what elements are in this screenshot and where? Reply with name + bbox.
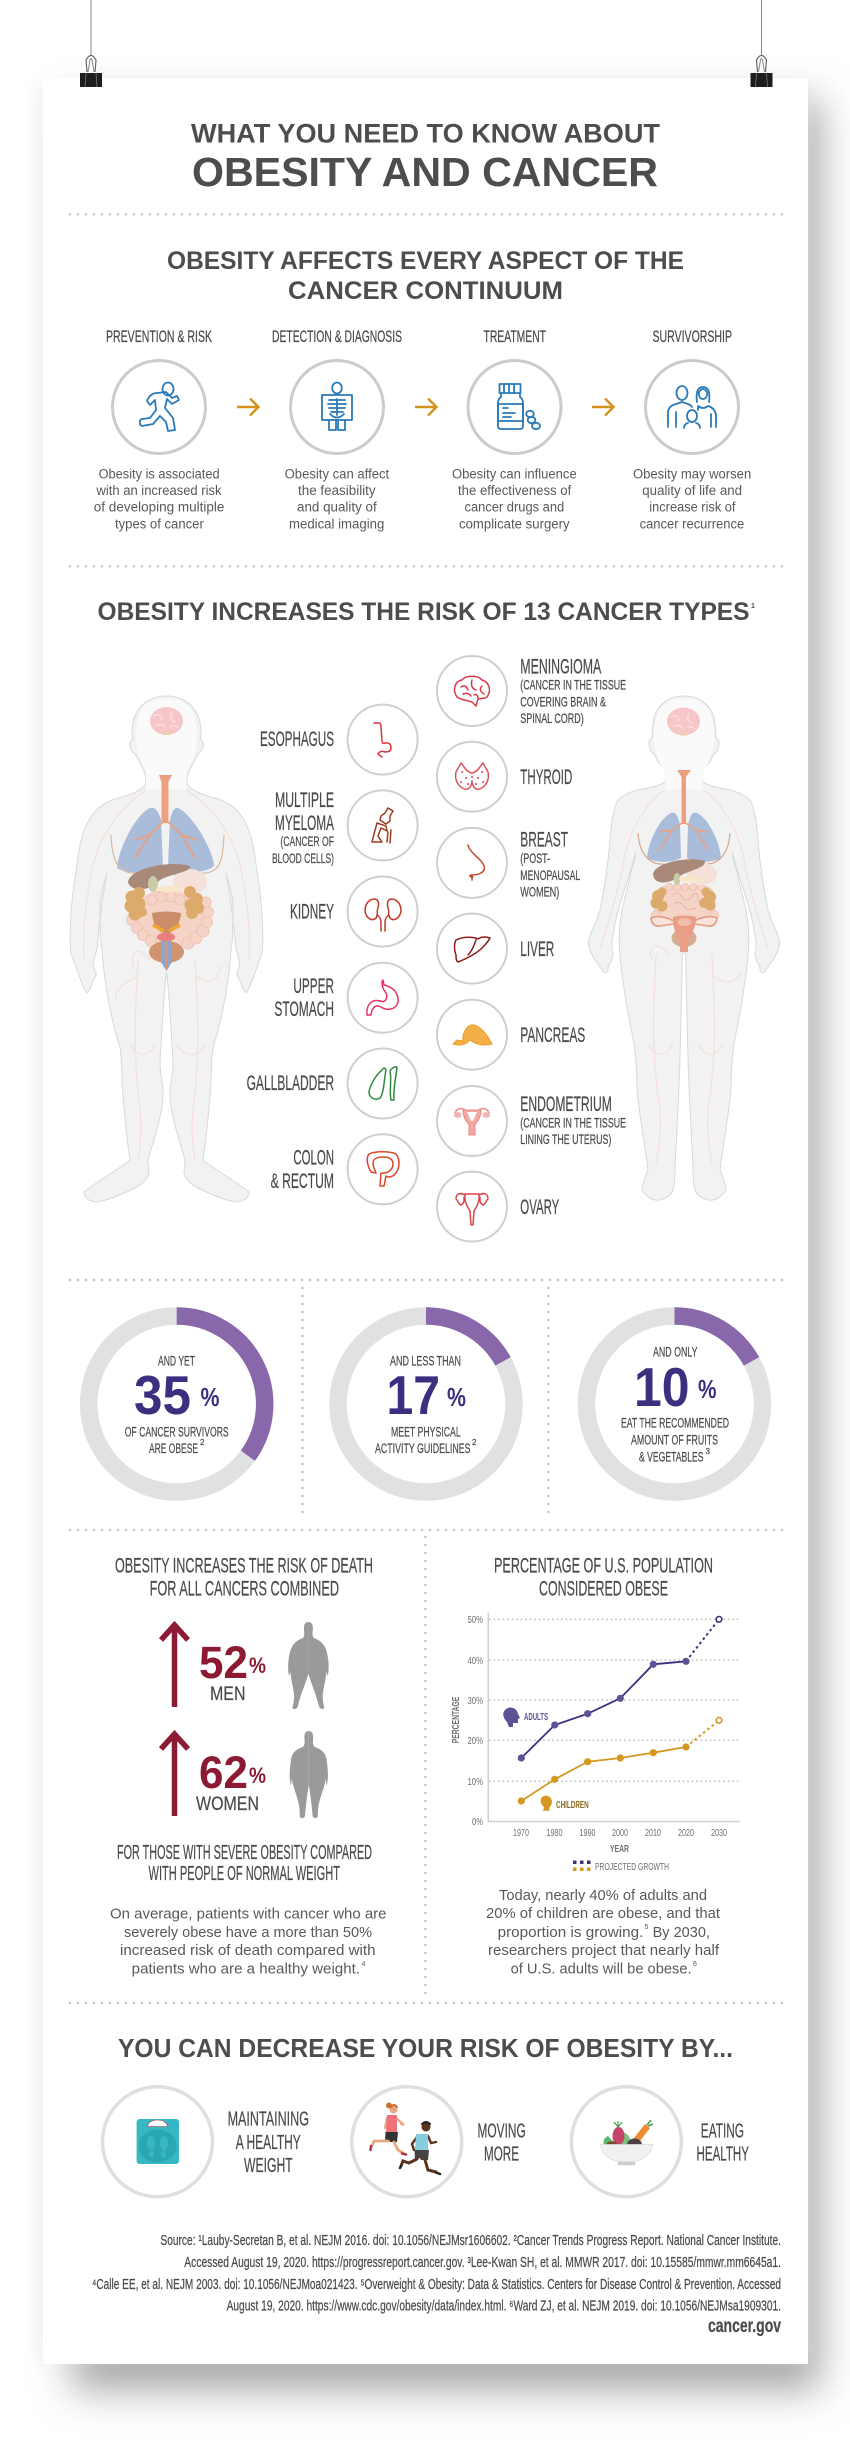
panel: survivorship: cancer recurrence	[640, 516, 744, 532]
paragraph: 5	[644, 1924, 648, 1931]
donut stat: 10 percent: %	[698, 1374, 716, 1404]
cancer type: breast: MENOPAUSAL	[520, 867, 580, 883]
heading: decrease your risk: YOU CAN DECREASE YOUR RISK OF OBESITY BY...	[118, 2035, 733, 2063]
organ: brain	[150, 707, 183, 735]
heading: cancer continuum: CANCER CONTINUUM	[288, 277, 563, 305]
panel: survivorship	[633, 327, 751, 532]
organ: brain	[667, 708, 700, 736]
paragraph: 20% of children are obese, and that	[486, 1905, 721, 1922]
organ: intestines	[652, 884, 718, 922]
icon: family	[668, 386, 716, 428]
panel: eating healthy: HEALTHY	[696, 2142, 749, 2166]
cancer type: breast: BREAST	[520, 828, 568, 852]
organ: colon	[650, 888, 716, 912]
donut stat: 17 percent: 17	[386, 1364, 440, 1426]
title: OBESITY AND CANCER	[192, 149, 658, 195]
arrow	[592, 398, 614, 416]
panel: maintaining a healthy weight: MAINTAINING	[228, 2108, 309, 2130]
panel: percentage obese	[450, 1554, 741, 1978]
heading: 13 cancer types: OBESITY INCREASES THE RISK OF 13 CANCER TYPES	[98, 598, 750, 626]
cancer type: meningioma: COVERING BRAIN &	[520, 694, 606, 710]
cancer type: gallbladder: GALLBLADDER	[247, 1072, 334, 1095]
series: children	[518, 1718, 722, 1811]
hanging clip: right	[750, 0, 772, 87]
line chart	[450, 1613, 741, 1873]
donut stat: 17 percent: MEET PHYSICAL	[391, 1424, 461, 1440]
donut stat: 10 percent: & VEGETABLES	[639, 1450, 704, 1464]
panel: survivorship: increase risk of	[649, 500, 736, 514]
line chart: 2000	[612, 1827, 628, 1839]
panel: moving more	[352, 2087, 526, 2197]
icon: runner	[140, 382, 179, 431]
sources	[92, 2233, 781, 2314]
arrow: women	[161, 1734, 188, 1816]
paragraph: 6	[693, 1961, 697, 1968]
cancer type: multiple myeloma: BLOOD CELLS)	[272, 850, 334, 866]
line chart: 20%	[468, 1735, 483, 1747]
female body with organs	[588, 696, 780, 1200]
cancer type: endometrium: (CANCER IN THE TISSUE	[520, 1114, 626, 1130]
line chart: 50%	[468, 1614, 483, 1626]
cancer type: thyroid	[437, 742, 572, 812]
panel: prevention and risk	[94, 327, 224, 532]
cancer type: endometrium: ENDOMETRIUM	[520, 1093, 612, 1116]
paragraph	[486, 1887, 721, 1978]
line chart: 1980	[546, 1827, 563, 1839]
donut stat: 17 percent: AND LESS THAN	[390, 1354, 461, 1368]
line chart: 1970	[513, 1827, 529, 1839]
cancer type: multiple myeloma: MULTIPLE	[275, 789, 334, 812]
icon: woman silhouette	[290, 1731, 328, 1818]
arrow: men	[161, 1625, 188, 1707]
donut stat: 17 percent	[338, 1316, 514, 1492]
panel: prevention and risk: with an increased risk	[96, 483, 222, 498]
panel: eating healthy	[571, 2087, 749, 2197]
panel: treatment: TREATMENT	[484, 327, 546, 346]
panel: prevention and risk: Obesity is associated	[99, 466, 220, 482]
paragraph: of U.S. adults will be obese.	[511, 1960, 692, 1978]
stat: 52 percent men: MEN	[210, 1684, 246, 1705]
hanging clip: left	[80, 0, 102, 87]
donut stat: 35 percent: ARE OBESE	[149, 1441, 198, 1456]
cancer type: upper stomach: STOMACH	[274, 998, 334, 1021]
cancer type: gallbladder	[247, 1048, 418, 1118]
heading: cancer continuum	[167, 247, 684, 305]
organ: trachea and bronchi	[677, 770, 691, 824]
paragraph: 4	[362, 1961, 366, 1968]
panel: detection and diagnosis: the feasibility	[298, 483, 376, 498]
stat: 52 percent men	[199, 1637, 266, 1705]
cancer type: thyroid: THYROID	[520, 766, 572, 789]
panel: treatment: the effectiveness of	[458, 483, 572, 498]
cancer type: meningioma: MENINGIOMA	[520, 656, 601, 678]
donut stat: 10 percent: 10	[634, 1356, 690, 1418]
male body with organs	[70, 696, 263, 1202]
donut stat: 35 percent: AND YET	[158, 1354, 195, 1368]
panel: detection and diagnosis	[272, 327, 402, 532]
line chart: YEAR	[610, 1843, 629, 1855]
heading: 13 cancer types: 1	[751, 603, 755, 610]
paragraph: By 2030,	[653, 1924, 710, 1941]
donut stat: 35 percent: 35	[134, 1364, 191, 1426]
cancer type: multiple myeloma: (CANCER OF	[280, 833, 334, 849]
stat: 62 percent women: 62	[199, 1747, 248, 1798]
organ: uterus and ovaries	[651, 917, 717, 926]
donut stat: 35 percent: %	[200, 1382, 220, 1412]
cancer type: pancreas: PANCREAS	[520, 1024, 585, 1047]
heading: cancer continuum: OBESITY AFFECTS EVERY ASPECT OF THE	[167, 247, 684, 275]
paragraph	[110, 1906, 386, 1978]
cancer type: multiple myeloma: MYELOMA	[275, 812, 334, 835]
cancer type: upper stomach: UPPER	[293, 975, 334, 998]
line chart: 0%	[472, 1816, 483, 1828]
line chart: PERCENTAGE	[450, 1697, 462, 1743]
cancer type: endometrium	[437, 1086, 626, 1156]
organ: lungs	[117, 808, 214, 872]
series: adults: ADULTS	[524, 1711, 548, 1723]
cancer type: endometrium: LINING THE UTERUS)	[520, 1131, 611, 1147]
organ: trachea and bronchi	[159, 775, 172, 823]
stat: 62 percent women: WOMEN	[196, 1794, 259, 1815]
panel: maintaining a healthy weight	[102, 2087, 309, 2197]
heading: PERCENTAGE OF U.S. POPULATION	[494, 1554, 713, 1578]
cancer type: colon and rectum: COLON	[293, 1146, 334, 1170]
cancer type: meningioma: SPINAL CORD)	[520, 710, 584, 726]
organ: liver and stomach	[687, 863, 717, 885]
paragraph: increased risk of death compared with	[120, 1942, 376, 1959]
cancer type: breast	[437, 828, 580, 900]
icon: runners	[370, 2102, 440, 2174]
line chart: 10%	[468, 1776, 483, 1788]
heading: OBESITY INCREASES THE RISK OF DEATH	[115, 1554, 373, 1578]
donut stat: 10 percent	[586, 1316, 762, 1492]
stat: 62 percent women	[196, 1747, 266, 1815]
cancer type: liver	[437, 914, 554, 984]
line chart: 30%	[468, 1695, 483, 1707]
heading	[494, 1554, 713, 1600]
heading: CONSIDERED OBESE	[539, 1578, 668, 1600]
series: children: CHILDREN	[556, 1799, 589, 1811]
icon: salad bowl	[600, 2120, 653, 2165]
panel: prevention and risk: PREVENTION & RISK	[106, 327, 212, 346]
organ: lungs	[647, 812, 721, 862]
paragraph: patients who are a healthy weight.	[132, 1960, 360, 1978]
donut stat: 10 percent: AND ONLY	[653, 1344, 698, 1360]
cancer type: liver: LIVER	[520, 938, 554, 961]
panel: prevention and risk: types of cancer	[115, 516, 204, 532]
panel: detection and diagnosis: Obesity can affect	[285, 466, 389, 482]
panel: treatment: Obesity can influence	[452, 466, 577, 482]
icon: man silhouette	[288, 1622, 329, 1709]
panel: detection and diagnosis: medical imaging	[289, 516, 384, 532]
panel: survivorship: quality of life and	[642, 483, 742, 498]
cancer type: pancreas	[437, 1000, 585, 1070]
stat: 62 percent women: %	[249, 1763, 266, 1788]
panel: treatment: cancer drugs and	[464, 500, 564, 514]
cancer type: kidney	[290, 876, 418, 946]
line chart: 2020	[678, 1827, 694, 1839]
icon: scale	[137, 2119, 179, 2164]
organ: pelvic organs	[152, 912, 181, 934]
panel: treatment	[452, 327, 577, 532]
arrow	[415, 398, 436, 416]
cancer type: kidney: KIDNEY	[290, 900, 334, 924]
title	[191, 118, 660, 195]
caption	[117, 1842, 372, 1885]
cancer type: multiple myeloma	[272, 789, 418, 866]
paragraph: severely obese have a more than 50%	[124, 1924, 372, 1941]
cancer type: meningioma	[437, 656, 626, 726]
organ: intestines	[126, 890, 214, 949]
donut stat: 35 percent: OF CANCER SURVIVORS	[125, 1424, 229, 1440]
donut stat: 17 percent: 2	[472, 1438, 477, 1447]
caption: FOR THOSE WITH SEVERE OBESITY COMPARED	[117, 1842, 372, 1864]
cancer type: ovary	[437, 1172, 559, 1242]
panel: treatment: complicate surgery	[459, 516, 570, 532]
website: cancer.gov	[708, 2316, 781, 2337]
cancer type: breast: (POST-	[520, 850, 550, 866]
stat: 52 percent men: %	[249, 1653, 266, 1678]
legend: projected growth	[573, 1860, 669, 1873]
panel: maintaining a healthy weight: WEIGHT	[244, 2154, 293, 2177]
cancer type: colon and rectum	[271, 1134, 418, 1204]
donut stat: 35 percent	[89, 1316, 265, 1492]
panel: moving more: MOVING	[478, 2120, 526, 2142]
panel: risk of death	[110, 1554, 386, 1978]
title: WHAT YOU NEED TO KNOW ABOUT	[191, 118, 660, 148]
organ: colon	[124, 886, 204, 920]
donut stat: 17 percent: ACTIVITY GUIDELINES	[375, 1441, 470, 1456]
donut stat: 35 percent: 2	[200, 1438, 205, 1447]
panel: detection and diagnosis: DETECTION & DIAGNOSIS	[272, 327, 402, 346]
panel: survivorship: Obesity may worsen	[633, 466, 751, 482]
icon: pill bottle	[498, 384, 540, 429]
panel: moving more: MORE	[484, 2142, 519, 2166]
panel: maintaining a healthy weight: A HEALTHY	[236, 2131, 301, 2154]
organ: liver and stomach	[173, 869, 207, 895]
donut stat: 10 percent: EAT THE RECOMMENDED	[621, 1416, 729, 1430]
arrow	[237, 398, 258, 416]
stat: 52 percent men: 52	[199, 1637, 248, 1688]
paragraph: Today, nearly 40% of adults and	[499, 1887, 707, 1904]
cancer type: breast: WOMEN)	[520, 884, 559, 900]
heading: FOR ALL CANCERS COMBINED	[150, 1578, 339, 1600]
paragraph: researchers project that nearly half	[488, 1942, 720, 1959]
panel: eating healthy: EATING	[701, 2120, 744, 2142]
legend: projected growth: PROJECTED GROWTH	[595, 1861, 669, 1873]
caption: WITH PEOPLE OF NORMAL WEIGHT	[148, 1863, 340, 1885]
icon: x-ray	[322, 382, 352, 430]
paragraph: On average, patients with cancer who are	[110, 1906, 386, 1922]
series: adults	[503, 1616, 722, 1762]
panel: survivorship: SURVIVORSHIP	[652, 327, 732, 346]
cancer type: upper stomach	[274, 963, 418, 1033]
line chart: 2010	[645, 1827, 661, 1839]
paragraph: proportion is growing.	[498, 1924, 643, 1941]
cancer type: colon and rectum: & RECTUM	[271, 1170, 334, 1193]
donut stat: 10 percent: 3	[706, 1447, 710, 1456]
cancer type: meningioma: (CANCER IN THE TISSUE	[520, 676, 626, 692]
donut stat: 17 percent: %	[447, 1382, 466, 1412]
panel: detection and diagnosis: and quality of	[297, 500, 377, 514]
line chart: 2030	[711, 1827, 727, 1839]
cancer type: esophagus: ESOPHAGUS	[260, 728, 334, 751]
cancer type: esophagus	[260, 705, 418, 775]
heading	[115, 1554, 373, 1600]
cancer type: ovary: OVARY	[520, 1196, 559, 1219]
line chart: 40%	[468, 1655, 483, 1667]
donut stat: 10 percent: AMOUNT OF FRUITS	[631, 1432, 718, 1448]
panel: prevention and risk: of developing multiple	[94, 500, 224, 514]
line chart: 1990	[580, 1827, 596, 1839]
